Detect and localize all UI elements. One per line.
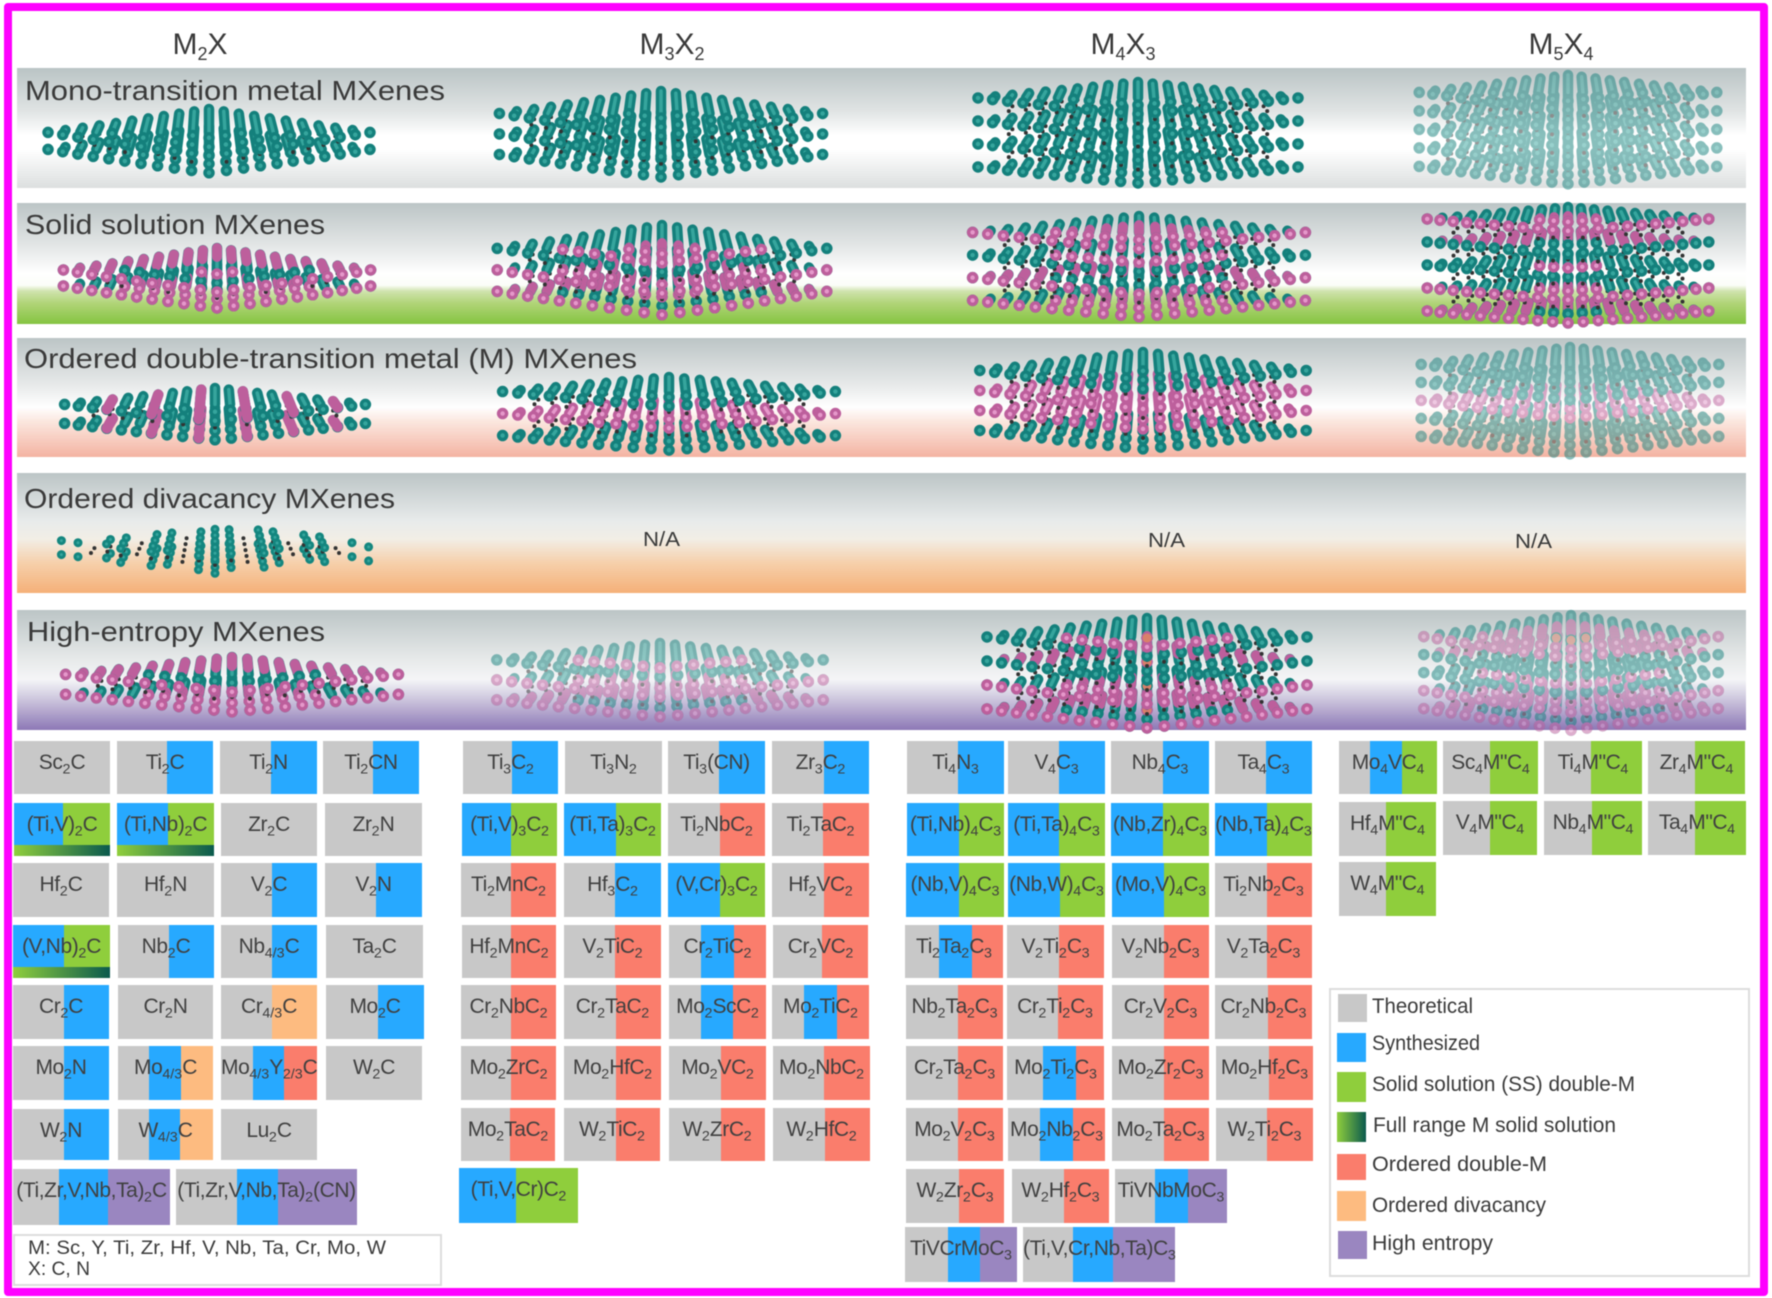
- row label: ordered double: Ordered double-transition metal (M) MXenes: [24, 343, 637, 374]
- tile: Zr2C: [221, 803, 317, 856]
- tile: Zr3C2: [772, 741, 869, 794]
- row label: high-entropy: High-entropy MXenes: [27, 616, 325, 647]
- tile: Hf4M"C4: [1339, 802, 1436, 856]
- panel: M3X2 composition tiles: [458, 740, 871, 1224]
- tile: Cr2Ti2C3: [1007, 985, 1103, 1039]
- tile: Hf3C2: Hf3C2: [587, 873, 638, 899]
- legend item: theoretical: Theoretical: [1372, 995, 1473, 1018]
- panel: M2X composition tiles: [12, 740, 425, 1226]
- tile: Mo2N: [13, 1046, 109, 1100]
- tile: Ti2NbC2: Ti2NbC2: [680, 813, 753, 839]
- tile: V2Nb2C3: [1112, 925, 1209, 978]
- tile: Ti2N: Ti2N: [249, 751, 288, 777]
- tile: (Nb,V)4C3: [906, 863, 1004, 917]
- tile: Ti4M"C4: Ti4M"C4: [1558, 751, 1628, 777]
- tile: Nb4M"C4: Nb4M"C4: [1553, 811, 1633, 837]
- note box: M and X elements: [14, 1235, 441, 1285]
- tile: V2Ta2C3: [1215, 925, 1312, 978]
- tile: Sc2C: Sc2C: [39, 751, 85, 777]
- tile: W2C: W2C: [353, 1056, 395, 1082]
- tile: (Ti,Nb)2C: [117, 803, 214, 856]
- legend item: theoretical: [1338, 994, 1473, 1022]
- tile: Ta2C: Ta2C: [352, 935, 397, 961]
- tile: Hf3C2: [564, 863, 661, 917]
- tile: Mo2ZrC2: Mo2ZrC2: [469, 1056, 548, 1082]
- tile: Mo2Nb2C3: [1008, 1108, 1105, 1161]
- tile: Cr2Nb2C3: [1215, 985, 1312, 1039]
- tile: Zr2N: [325, 803, 422, 856]
- panel: high-entropy MXenes row: [17, 610, 1746, 730]
- legend item: solid solution double-M: [1337, 1072, 1635, 1102]
- tile: Ti3N2: Ti3N2: [590, 751, 637, 777]
- tile: TiVNbMoC3: TiVNbMoC3: [1118, 1179, 1224, 1205]
- tile: Cr2VC2: [773, 925, 868, 978]
- tile: Cr2TaC2: Cr2TaC2: [576, 995, 649, 1021]
- tile: (Ti,V,Cr)C2: (Ti,V,Cr)C2: [471, 1178, 566, 1204]
- lattice: divacancy M2X: [61, 529, 369, 574]
- panel: ordered divacancy MXenes row: [17, 473, 1746, 593]
- tile: Hf2MnC2: Hf2MnC2: [469, 935, 549, 961]
- tile: (Ti,Ta)3C2: (Ti,Ta)3C2: [569, 813, 656, 839]
- tile: (Nb,Ta)4C3: (Nb,Ta)4C3: [1215, 813, 1312, 839]
- tile: Mo4VC4: [1339, 741, 1437, 794]
- tile: Nb4/3C: Nb4/3C: [239, 935, 299, 961]
- tile: V2N: [325, 863, 422, 917]
- tile: Mo2V2C3: Mo2V2C3: [914, 1118, 995, 1144]
- tile: V4M"C4: [1443, 801, 1537, 855]
- tile: (Ti,Ta)4C3: (Ti,Ta)4C3: [1013, 813, 1100, 839]
- tile: Ti3C2: [463, 741, 558, 794]
- tile: Mo2Ti2C3: Mo2Ti2C3: [1014, 1056, 1097, 1082]
- tile: Mo2Ta2C3: Mo2Ta2C3: [1116, 1118, 1205, 1144]
- tile: Mo2TaC2: Mo2TaC2: [468, 1118, 548, 1144]
- tile: W4/3C: W4/3C: [138, 1119, 193, 1145]
- not available: M4X3: N/A: [1148, 530, 1186, 552]
- lattice: ordered double M5X4 (faded): [1421, 347, 1719, 454]
- tile: Mo2Zr2C3: Mo2Zr2C3: [1118, 1056, 1203, 1082]
- tile: Cr2C: Cr2C: [39, 995, 83, 1021]
- tile: W2Zr2C3: W2Zr2C3: [916, 1179, 994, 1205]
- tile: Zr4M"C4: [1648, 741, 1745, 794]
- tile: (Ti,Nb)4C3: (Ti,Nb)4C3: [910, 813, 1001, 839]
- column header: M5X4: 5: [1553, 44, 1563, 64]
- tile: V2N: V2N: [355, 873, 392, 899]
- tile: Ta4M"C4: [1648, 801, 1746, 855]
- tile: (Nb,Zr)4C3: [1111, 803, 1209, 856]
- tile: Mo2N: Mo2N: [35, 1056, 87, 1082]
- tile: Ta4M"C4: Ta4M"C4: [1659, 811, 1735, 837]
- note box: M and X elements: M: Sc, Y, Ti, Zr, Hf, V, Nb, Ta, Cr, Mo, W: [28, 1238, 386, 1259]
- tile: Ti2MnC2: [461, 863, 556, 917]
- tile: Hf2N: Hf2N: [144, 873, 187, 899]
- tile: Ti3C2: Ti3C2: [487, 751, 534, 777]
- tile: Ti2C: [117, 741, 213, 794]
- tile: Nb4C3: Nb4C3: [1132, 751, 1188, 777]
- tile: (Nb,V)4C3: (Nb,V)4C3: [911, 873, 999, 899]
- legend item: ordered double-M: [1337, 1153, 1547, 1180]
- tile: W2Ti2C3: W2Ti2C3: [1228, 1118, 1301, 1144]
- tile: Ta4C3: [1215, 741, 1312, 794]
- tile: Mo2C: [326, 985, 424, 1039]
- tile: Mo4/3Y2/3C: [221, 1046, 317, 1100]
- tile: Ti2Nb2C3: [1215, 863, 1312, 917]
- tile: W2TiC2: W2TiC2: [579, 1118, 645, 1144]
- tile: Cr2Ti2C3: Cr2Ti2C3: [1017, 995, 1093, 1021]
- tile: V2Ta2C3: V2Ta2C3: [1227, 935, 1300, 961]
- tile: Lu2C: Lu2C: [246, 1119, 292, 1145]
- tile: Mo2HfC2: [564, 1046, 661, 1100]
- tile: Ti2NbC2: [668, 803, 765, 856]
- tile: Cr2NbC2: Cr2NbC2: [469, 995, 548, 1021]
- tile: W4/3C: [118, 1109, 213, 1160]
- lattice: ordered double M2X: [65, 388, 365, 440]
- tile: Nb4C3: [1111, 741, 1209, 794]
- tile: Cr2Ta2C3: Cr2Ta2C3: [914, 1056, 995, 1082]
- tile: Mo2Ta2C3: [1112, 1108, 1209, 1161]
- tile: Ta2C: [326, 925, 423, 978]
- tile: Lu2C: [221, 1109, 317, 1160]
- tile: Hf2VC2: [772, 863, 869, 917]
- tile: V2Ti2C3: [1007, 925, 1104, 978]
- tile: (V,Nb)2C: [13, 925, 110, 978]
- tile: (Nb,Ta)4C3: [1215, 803, 1312, 856]
- tile: Ti4N3: Ti4N3: [932, 751, 979, 777]
- column header: M3X2: 3: [664, 44, 674, 64]
- tile: Ti2TaC2: [772, 803, 869, 856]
- tile: Ti2CN: [323, 741, 419, 794]
- tile: (Ti,V,Cr,Nb,Ta)C3: (Ti,V,Cr,Nb,Ta)C3: [1023, 1237, 1176, 1263]
- tile: W4M"C4: W4M"C4: [1350, 872, 1425, 898]
- tile: (Ti,Nb)2C: (Ti,Nb)2C: [124, 813, 207, 839]
- tile: Zr3C2: Zr3C2: [796, 751, 845, 777]
- tile: Mo2VC2: [669, 1046, 766, 1100]
- tile: (Ti,V)3C2: [462, 803, 557, 856]
- tile: Ti4M"C4: [1544, 741, 1642, 794]
- legend item: high entropy: [1338, 1231, 1493, 1259]
- tile: Cr2TaC2: [564, 985, 661, 1039]
- tile: Mo2V2C3: [906, 1108, 1003, 1161]
- tile: Mo4/3C: Mo4/3C: [134, 1056, 197, 1082]
- tile: V2TiC2: [564, 925, 661, 978]
- tile: Sc2C: [14, 741, 110, 794]
- tile: W2HfC2: W2HfC2: [786, 1118, 857, 1144]
- tile: Mo2Ti2C3: [1007, 1046, 1104, 1100]
- tile: Cr2V2C3: Cr2V2C3: [1124, 995, 1197, 1021]
- tile: Cr2Nb2C3: Cr2Nb2C3: [1220, 995, 1306, 1021]
- note box: M and X elements: X: C, N: [28, 1259, 90, 1280]
- tile: (V,Cr)3C2: (V,Cr)3C2: [675, 873, 758, 899]
- tile: Mo4/3C: [118, 1046, 213, 1100]
- lattice: mono M5X4 (faded): [1419, 75, 1717, 184]
- column header: M3X2: X: [674, 28, 695, 61]
- lattice: solid solution M3X2: [497, 225, 827, 315]
- tile: Mo2Nb2C3: Mo2Nb2C3: [1010, 1118, 1103, 1144]
- tile: (Mo,V)4C3: (Mo,V)4C3: [1115, 873, 1206, 899]
- tile: Mo2ScC2: [669, 985, 766, 1039]
- tile: V4C3: [1008, 741, 1105, 794]
- tile: Cr2Ta2C3: [906, 1046, 1003, 1100]
- tile: Cr2VC2: Cr2VC2: [788, 935, 853, 961]
- column header: M4X3: 4: [1115, 44, 1125, 64]
- tile: Mo2ZrC2: [461, 1046, 556, 1100]
- tile: V4M"C4: V4M"C4: [1456, 811, 1524, 837]
- column header: M5X4: M: [1528, 28, 1553, 61]
- tile: V2C: [221, 863, 317, 917]
- tile: (Ti,V)3C2: (Ti,V)3C2: [470, 813, 549, 839]
- column header: M2X: M: [172, 28, 197, 61]
- tile: Mo2NbC2: [773, 1046, 870, 1100]
- tile: (Ti,Zr,V,Nb,Ta)2(CN): [176, 1169, 357, 1225]
- tile: Sc4M"C4: [1443, 741, 1538, 794]
- tile: W2N: [13, 1109, 109, 1160]
- tile: Mo2NbC2: Mo2NbC2: [779, 1056, 864, 1082]
- tile: Hf2VC2: Hf2VC2: [788, 873, 853, 899]
- legend item: ordered divacancy: Ordered divacancy: [1372, 1194, 1546, 1217]
- tile: W2Hf2C3: W2Hf2C3: [1021, 1179, 1100, 1205]
- tile: Mo2TiC2: [772, 985, 869, 1039]
- tile: Ti2C: Ti2C: [146, 751, 184, 777]
- panel: mono-transition metal MXenes row: [17, 68, 1746, 188]
- tile: W2Hf2C3: [1012, 1169, 1109, 1223]
- tile: Nb4/3C: [221, 925, 317, 978]
- tile: (Ti,Ta)3C2: [564, 803, 661, 856]
- tile: Mo2Hf2C3: [1216, 1046, 1313, 1100]
- column header: M3X2: M: [639, 28, 664, 61]
- tile: Nb2Ta2C3: [906, 985, 1003, 1039]
- tile: W2ZrC2: W2ZrC2: [682, 1118, 752, 1144]
- tile: (Ti,V,Cr,Nb,Ta)C3: [1023, 1227, 1175, 1282]
- tile: Hf4M"C4: Hf4M"C4: [1350, 812, 1425, 838]
- tile: Mo2HfC2: Mo2HfC2: [573, 1056, 652, 1082]
- lattice: solid solution M4X3: [973, 216, 1305, 317]
- lattice: mono M4X3: [978, 82, 1298, 183]
- tile: Cr2TiC2: [669, 925, 766, 978]
- tile: Mo2Hf2C3: Mo2Hf2C3: [1221, 1056, 1308, 1082]
- lattice: ordered double M4X3: [980, 352, 1306, 449]
- column header: M2X: X: [208, 28, 228, 61]
- tile: (V,Nb)2C: (V,Nb)2C: [22, 935, 101, 961]
- tile: W2C: [326, 1046, 422, 1100]
- tile: Cr2N: [118, 985, 213, 1039]
- lattice: solid solution M5X4: [1427, 207, 1709, 323]
- tile: (Nb,W)4C3: (Nb,W)4C3: [1009, 873, 1104, 899]
- tile: Ta4C3: Ta4C3: [1237, 751, 1290, 777]
- tile: (Ti,V)2C: (Ti,V)2C: [27, 813, 97, 839]
- legend item: full range M solid solution: [1337, 1112, 1616, 1142]
- tile: Zr4M"C4: Zr4M"C4: [1660, 751, 1733, 777]
- lattice: high-entropy M4X3: [987, 618, 1307, 728]
- tile: Hf2C: [13, 863, 109, 917]
- tile: V2Ti2C3: V2Ti2C3: [1021, 935, 1090, 961]
- tile: Cr4/3C: Cr4/3C: [241, 995, 297, 1021]
- tile: W4M"C4: [1339, 862, 1436, 916]
- lattice: high-entropy M3X2 (faded): [497, 643, 823, 717]
- tile: (Mo,V)4C3: [1112, 863, 1209, 917]
- tile: W2Ti2C3: [1216, 1108, 1313, 1161]
- lattice: high-entropy M5X4 (faded): [1424, 615, 1718, 730]
- tile: Cr4/3C: [221, 985, 317, 1039]
- tile: Hf2N: [117, 863, 214, 917]
- tile: Ti2Nb2C3: Ti2Nb2C3: [1223, 873, 1304, 899]
- tile: Nb2C: Nb2C: [142, 935, 190, 961]
- tile: Ti3(CN): Ti3(CN): [683, 751, 750, 777]
- column header: M4X3: X: [1125, 28, 1146, 61]
- column header: M5X4: X: [1563, 28, 1584, 61]
- tile: TiVNbMoC3: [1115, 1169, 1227, 1223]
- tile: Sc4M"C4: Sc4M"C4: [1451, 751, 1530, 777]
- tile: (Ti,V,Cr)C2: [459, 1168, 578, 1223]
- panel: M5X4 composition tiles: [1338, 740, 1747, 917]
- tile: Cr2N: Cr2N: [143, 995, 188, 1021]
- legend item: ordered double-M: Ordered double-M: [1372, 1153, 1547, 1176]
- tile: (V,Cr)3C2: [668, 863, 765, 917]
- tile: Ti2TaC2: Ti2TaC2: [787, 813, 854, 839]
- tile: Ti2MnC2: Ti2MnC2: [471, 873, 546, 899]
- tile: W2Zr2C3: [906, 1169, 1004, 1223]
- tile: W2HfC2: [773, 1108, 870, 1161]
- not available: M5X4: N/A: [1515, 531, 1553, 553]
- column header: M2X: 2: [197, 44, 208, 64]
- tile: (Ti,Nb)4C3: [907, 803, 1004, 856]
- tile: Ti3N2: [565, 741, 662, 794]
- not available: M3X2: N/A: [643, 529, 681, 551]
- tile: Zr2C: Zr2C: [248, 813, 290, 839]
- legend item: ordered divacancy: [1337, 1191, 1546, 1221]
- column header: M4X3: M: [1090, 28, 1115, 61]
- tile: TiVCrMoC3: [905, 1227, 1017, 1282]
- tile: V2Nb2C3: V2Nb2C3: [1121, 935, 1200, 961]
- tile: Ti2N: [220, 741, 317, 794]
- column header: M4X3: 3: [1146, 44, 1156, 64]
- tile: Mo2VC2: Mo2VC2: [681, 1056, 754, 1082]
- tile: Nb4M"C4: [1544, 801, 1642, 855]
- tile: Ti2CN: Ti2CN: [344, 751, 398, 777]
- tile: Mo2TaC2: [461, 1108, 555, 1161]
- tile: (Ti,Ta)4C3: [1008, 803, 1105, 856]
- panel: M4X3 composition tiles: [904, 740, 1314, 1283]
- legend item: full range M solid solution: Full range M solid solution: [1373, 1114, 1616, 1137]
- column header: M5X4: 4: [1584, 44, 1594, 64]
- row label: divacancy: Ordered divacancy MXenes: [24, 483, 395, 514]
- tile: (Ti,Zr,V,Nb,Ta)2C: [13, 1169, 170, 1225]
- tile: Nb2C: [118, 925, 214, 978]
- tile: (Ti,V)2C: [14, 803, 110, 856]
- tile: Ti2Ta2C3: Ti2Ta2C3: [916, 935, 992, 961]
- tile: Nb2Ta2C3: Nb2Ta2C3: [911, 995, 998, 1021]
- tile: Hf2C: Hf2C: [40, 873, 82, 899]
- column header: M3X2: 2: [695, 44, 705, 64]
- row label: mono-transition: Mono-transition metal MXenes: [25, 75, 445, 106]
- tile: Cr2TiC2: Cr2TiC2: [684, 935, 751, 961]
- lattice: solid solution M2X: [63, 248, 371, 308]
- legend item: solid solution double-M: Solid solution (SS) double-M: [1372, 1073, 1635, 1096]
- tile: (Ti,Zr,V,Nb,Ta)2C: (Ti,Zr,V,Nb,Ta)2C: [16, 1179, 167, 1205]
- tile: V4C3: V4C3: [1034, 751, 1079, 777]
- tile: V2C: V2C: [251, 873, 287, 899]
- tile: Ti2Ta2C3: [905, 925, 1003, 978]
- lattice: ordered double M3X2: [503, 377, 835, 450]
- tile: (Nb,W)4C3: [1008, 863, 1105, 917]
- row label: solid solution: Solid solution MXenes: [25, 209, 325, 240]
- tile: Cr2V2C3: [1112, 985, 1209, 1039]
- tile: Cr2NbC2: [461, 985, 556, 1039]
- tile: Mo2ScC2: Mo2ScC2: [676, 995, 759, 1021]
- tile: Hf2MnC2: [462, 925, 556, 978]
- tile: Mo2TiC2: Mo2TiC2: [783, 995, 858, 1021]
- tile: Mo2Zr2C3: [1112, 1046, 1209, 1100]
- tile: Ti3(CN): [668, 741, 765, 794]
- tile: Mo4VC4: Mo4VC4: [1352, 751, 1424, 777]
- lattice: mono M2X: [48, 109, 370, 173]
- tile: Cr2C: [13, 985, 109, 1039]
- legend item: synthesized: [1337, 1032, 1480, 1062]
- legend: [1330, 989, 1749, 1276]
- legend item: synthesized: Synthesized: [1372, 1032, 1480, 1055]
- tile: W2TiC2: [564, 1108, 660, 1161]
- tile: Zr2N: Zr2N: [353, 813, 394, 839]
- tile: (Nb,Zr)4C3: (Nb,Zr)4C3: [1113, 813, 1207, 839]
- tile: TiVCrMoC3: TiVCrMoC3: [910, 1237, 1012, 1263]
- tile: Ti4N3: [907, 741, 1004, 794]
- lattice: high-entropy M2X: [66, 657, 398, 712]
- tile: (Ti,Zr,V,Nb,Ta)2(CN): (Ti,Zr,V,Nb,Ta)2(CN): [177, 1179, 356, 1205]
- lattice: mono M3X2: [499, 91, 823, 177]
- legend item: high entropy: High entropy: [1372, 1232, 1493, 1255]
- tile: Mo2C: Mo2C: [349, 995, 401, 1021]
- panel: solid solution MXenes row: [17, 203, 1746, 324]
- tile: Mo4/3Y2/3C: Mo4/3Y2/3C: [221, 1056, 317, 1082]
- panel: ordered double-transition metal MXenes row: [17, 338, 1746, 457]
- tile: W2ZrC2: [669, 1108, 765, 1161]
- tile: V2TiC2: V2TiC2: [582, 935, 643, 961]
- tile: W2N: W2N: [40, 1119, 82, 1145]
